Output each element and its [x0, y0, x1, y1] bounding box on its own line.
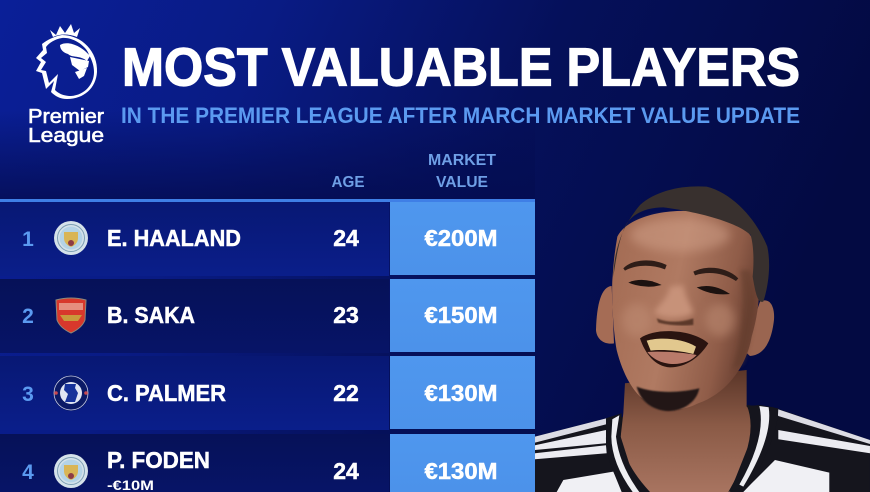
player name: P. FODEN	[107, 447, 210, 473]
market value: €130M	[424, 458, 498, 484]
logo: Premier League	[28, 24, 104, 147]
title: MOST VALUABLE PLAYERS	[122, 38, 800, 98]
forehead highlight	[630, 218, 730, 252]
row 4	[0, 434, 535, 492]
subtitle: IN THE PREMIER LEAGUE AFTER MARCH MARKET VALUE UPDATE	[121, 103, 800, 128]
eyebrows	[623, 260, 667, 271]
player name: B. SAKA	[107, 302, 195, 328]
age: 24	[333, 458, 359, 484]
icon: Arsenal crest	[56, 298, 86, 333]
row 3	[0, 356, 535, 430]
market value: €130M	[424, 380, 498, 406]
player name: E. HAALAND	[107, 225, 241, 251]
player name: C. PALMER	[107, 380, 226, 406]
icon: Manchester City crest	[54, 221, 88, 255]
row 2	[0, 279, 535, 353]
mouth	[640, 331, 708, 367]
age: 23	[333, 302, 359, 328]
column: market value: MARKET	[428, 152, 496, 169]
rank: 4	[22, 461, 34, 484]
eyes	[628, 280, 662, 287]
rank: 2	[22, 305, 34, 328]
jersey	[535, 405, 870, 492]
header line	[0, 199, 535, 202]
goatee	[637, 387, 699, 411]
face	[612, 211, 759, 410]
icon: Manchester City crest	[54, 454, 88, 488]
ear left	[596, 286, 614, 344]
ear right	[743, 300, 774, 356]
age: 24	[333, 225, 359, 251]
market value: €200M	[424, 225, 498, 251]
rank: 1	[22, 228, 34, 251]
collar	[606, 405, 778, 492]
row 1	[0, 202, 535, 276]
market value: €150M	[424, 302, 498, 328]
rank: 3	[22, 383, 34, 406]
age: 22	[333, 380, 359, 406]
column: market value: VALUE	[436, 174, 488, 191]
table header	[332, 152, 496, 191]
logo: Premier League: League	[28, 125, 104, 147]
column: age: AGE	[332, 174, 365, 191]
neck	[621, 370, 760, 492]
cheek highlights	[622, 303, 735, 337]
player photo illustration	[535, 186, 870, 492]
icon: lion with crown	[36, 24, 97, 99]
nose	[654, 285, 693, 318]
right side shadow	[732, 270, 754, 370]
wordmark: Premier	[28, 106, 104, 128]
hair	[613, 186, 769, 302]
icon: Chelsea crest	[53, 375, 89, 411]
